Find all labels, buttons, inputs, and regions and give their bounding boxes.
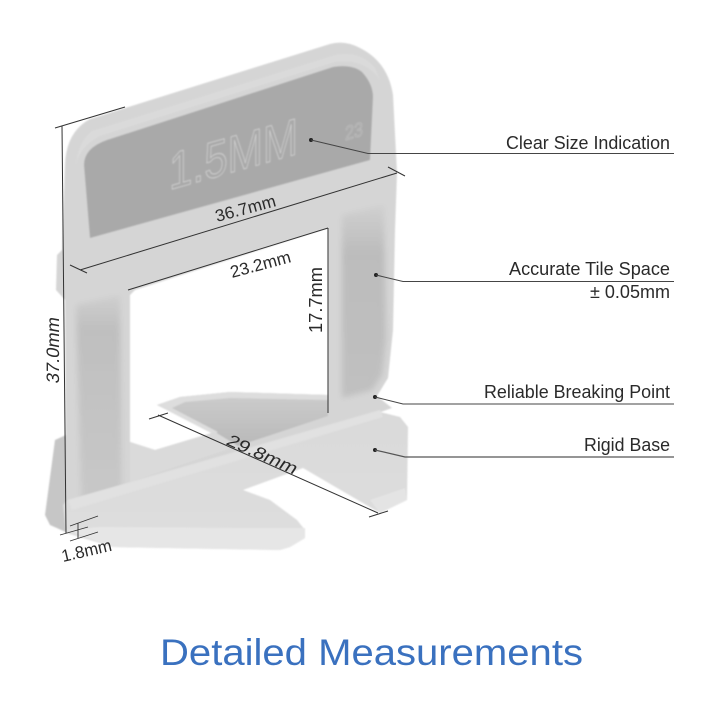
tile spacer product (45, 43, 408, 550)
dimension: 23.2mm window width (128, 228, 328, 290)
title: Detailed Measurements (160, 632, 583, 673)
spacer: inner base web (130, 432, 238, 482)
callout: rigid base (373, 435, 674, 457)
spacer: plate and pillars (56, 43, 397, 500)
dimension: 17.7mm window height: 17.7mm (306, 267, 326, 333)
spacer: base ridge (68, 410, 383, 510)
dimension: 36.7mm width (70, 167, 405, 273)
callout: reliable breaking point: Reliable Breaking Point (484, 382, 670, 402)
spacer: engraved size mark: 1.5MM (169, 108, 298, 202)
callout: accurate tile space (374, 259, 674, 302)
spacer: left pillar shading (76, 295, 122, 522)
spacer: rear base left edge (45, 435, 68, 533)
dimension: 29.8mm base depth: 29.8mm (223, 431, 303, 478)
callout: accurate tile space: ± 0.05mm (590, 282, 670, 302)
dimension: 37.0mm height: 37.0mm (43, 315, 63, 385)
callout: accurate tile space: Accurate Tile Space (509, 259, 670, 279)
callout: reliable breaking point (373, 382, 674, 404)
callout: clear size indication: Clear Size Indication (506, 133, 670, 153)
spacer: rear base triangle (157, 392, 330, 447)
dimension: 1.8mm base thickness (60, 516, 114, 566)
spacer: engraved size mark: 23 (345, 119, 363, 145)
dimension: 36.7mm width: 36.7mm (213, 191, 278, 226)
dimension: 29.8mm base depth (149, 413, 388, 517)
callout: clear size indication (309, 133, 674, 154)
dimension: 37.0mm height (43, 107, 125, 533)
spacer: front base with arrow tip (63, 412, 408, 550)
spacer: plate top rim highlight (76, 54, 380, 165)
spacer: grey label panel (84, 66, 373, 238)
spacer: right pillar shading (342, 205, 386, 398)
spacer: base lower lip (66, 527, 305, 550)
spacer: base right lip (370, 488, 407, 513)
dimension: 23.2mm window width: 23.2mm (228, 247, 293, 282)
callout: rigid base: Rigid Base (584, 435, 670, 455)
dimension: 1.8mm base thickness: 1.8mm (60, 536, 114, 566)
